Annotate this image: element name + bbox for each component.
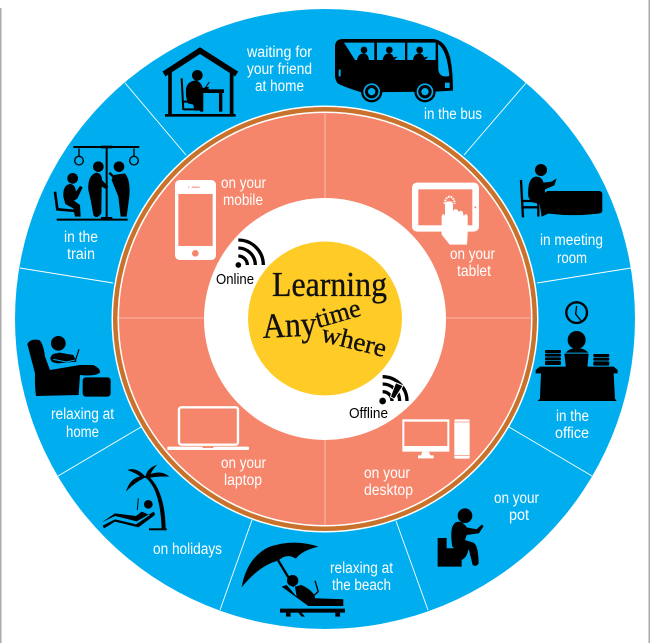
icon: tablet (412, 183, 479, 245)
label: on your pot (494, 490, 539, 524)
icon: bus (335, 39, 453, 102)
icon: desktop (402, 419, 470, 459)
label: relaxing at home: relaxing at (51, 406, 115, 423)
icon: house with reader (164, 51, 237, 117)
label: on your tablet: on your (450, 246, 495, 263)
label: on holidays: on holidays (153, 541, 222, 558)
icon: palm tree and hammock (102, 465, 169, 530)
label: in meeting room: room (557, 250, 587, 267)
icon: online wifi (235, 240, 263, 268)
label: waiting for your friend at home: waiting for (246, 44, 312, 61)
label: offline: Offline (349, 405, 388, 422)
label: on your laptop: on your (221, 455, 266, 472)
icon: meeting room (521, 164, 602, 217)
label: in the office (555, 408, 589, 442)
label: on your tablet (450, 246, 495, 280)
label: relaxing at the beach (330, 560, 394, 594)
icon: laptop (167, 407, 249, 450)
label: in the train: train (67, 246, 95, 263)
center circle: title (248, 242, 402, 396)
center circle: title: Any (261, 304, 318, 346)
panel: inner device ring (112, 106, 538, 532)
label: in meeting room: in meeting (540, 232, 603, 249)
label: waiting for your friend at home: at home (255, 78, 304, 95)
label: on your tablet: tablet (457, 263, 492, 280)
label: waiting for your friend at home: your friend (247, 61, 312, 78)
label: relaxing at home (51, 406, 115, 441)
icon: train commuters (55, 146, 139, 221)
center circle: title: time (312, 293, 364, 334)
icon: office desk (536, 302, 618, 401)
label: on your laptop: laptop (224, 472, 262, 489)
label: relaxing at the beach: relaxing at (330, 560, 394, 577)
label: in the train: in the (64, 229, 98, 246)
icon: armchair (27, 336, 111, 397)
icon: person on toilet (438, 508, 484, 567)
label: on your laptop (221, 455, 266, 489)
label: on your desktop: on your (364, 465, 410, 482)
label: waiting for your friend at home (246, 44, 312, 95)
icon: offline wifi (379, 377, 407, 404)
icon: mobile (175, 180, 216, 260)
label: in the office: in the (556, 408, 589, 425)
center circle: title: where (319, 319, 390, 363)
label: on your mobile (221, 175, 266, 209)
label: relaxing at the beach: the beach (332, 577, 391, 594)
label: relaxing at home: home (66, 424, 99, 441)
label: on your desktop: desktop (364, 482, 413, 499)
label: in the office: office (555, 425, 589, 442)
label: on your mobile: on your (221, 175, 266, 192)
icon: beach umbrella and lounger (242, 543, 345, 617)
label: in the train (64, 229, 98, 263)
label: on your mobile: mobile (223, 192, 263, 209)
label: online: Online (216, 271, 254, 288)
label: on your pot: pot (509, 507, 530, 524)
label: on your pot: on your (494, 490, 539, 507)
label: on your desktop (364, 465, 413, 499)
label: in the bus: in the bus (424, 106, 482, 123)
center circle: title: Learning (272, 265, 387, 304)
label: in meeting room (540, 232, 603, 267)
